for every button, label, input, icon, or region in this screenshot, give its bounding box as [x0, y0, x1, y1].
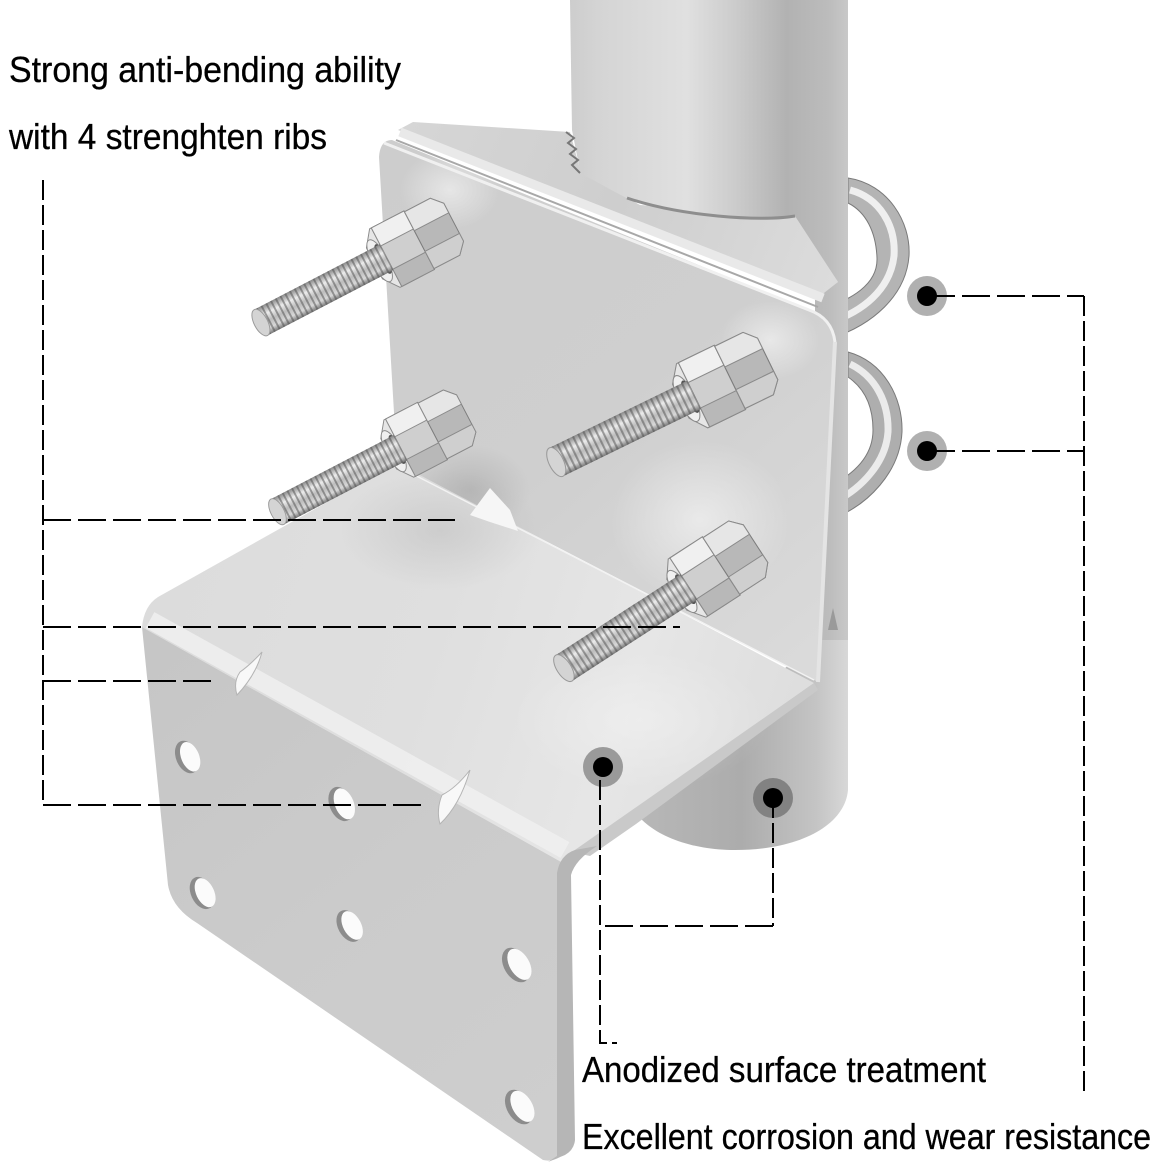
- text: anti-bending callout: with 4 strenghten ribs: [8, 116, 327, 157]
- right edge strip: [572, 683, 818, 856]
- callout markers: [583, 276, 947, 818]
- text: surface treatment callout: Anodized surface treatment: [582, 1049, 986, 1090]
- icon: strengthening ribs: [236, 652, 470, 824]
- flange serrations: [566, 132, 580, 173]
- text: surface treatment callout: [582, 1049, 1151, 1157]
- panel: front plate: [142, 627, 563, 1161]
- bevel along front bend: [150, 620, 565, 850]
- plate shading: [400, 150, 820, 600]
- bend crease: [397, 466, 814, 680]
- flange fold ridge: [384, 132, 835, 342]
- plate right edge: [818, 342, 835, 682]
- mast pole: [570, 0, 848, 850]
- icon: upper U-bolt: [824, 178, 909, 338]
- icon: mounting holes: [170, 737, 540, 1129]
- panel: top flange: [398, 122, 838, 300]
- plate edge thickness: [548, 846, 597, 1162]
- icon: threaded bolts: [240, 193, 783, 701]
- icon: gusset weld: [470, 488, 518, 531]
- icon: lower U-bolt: [834, 352, 902, 518]
- text: anti-bending callout: Strong anti-bending ability: [9, 49, 401, 90]
- horizontal plate shading: [340, 470, 770, 790]
- panel: vertical plate: [379, 140, 835, 682]
- dashed leader lines: [43, 180, 1084, 1092]
- text: anti-bending callout: [8, 49, 401, 157]
- panel: horizontal plate: [142, 463, 814, 863]
